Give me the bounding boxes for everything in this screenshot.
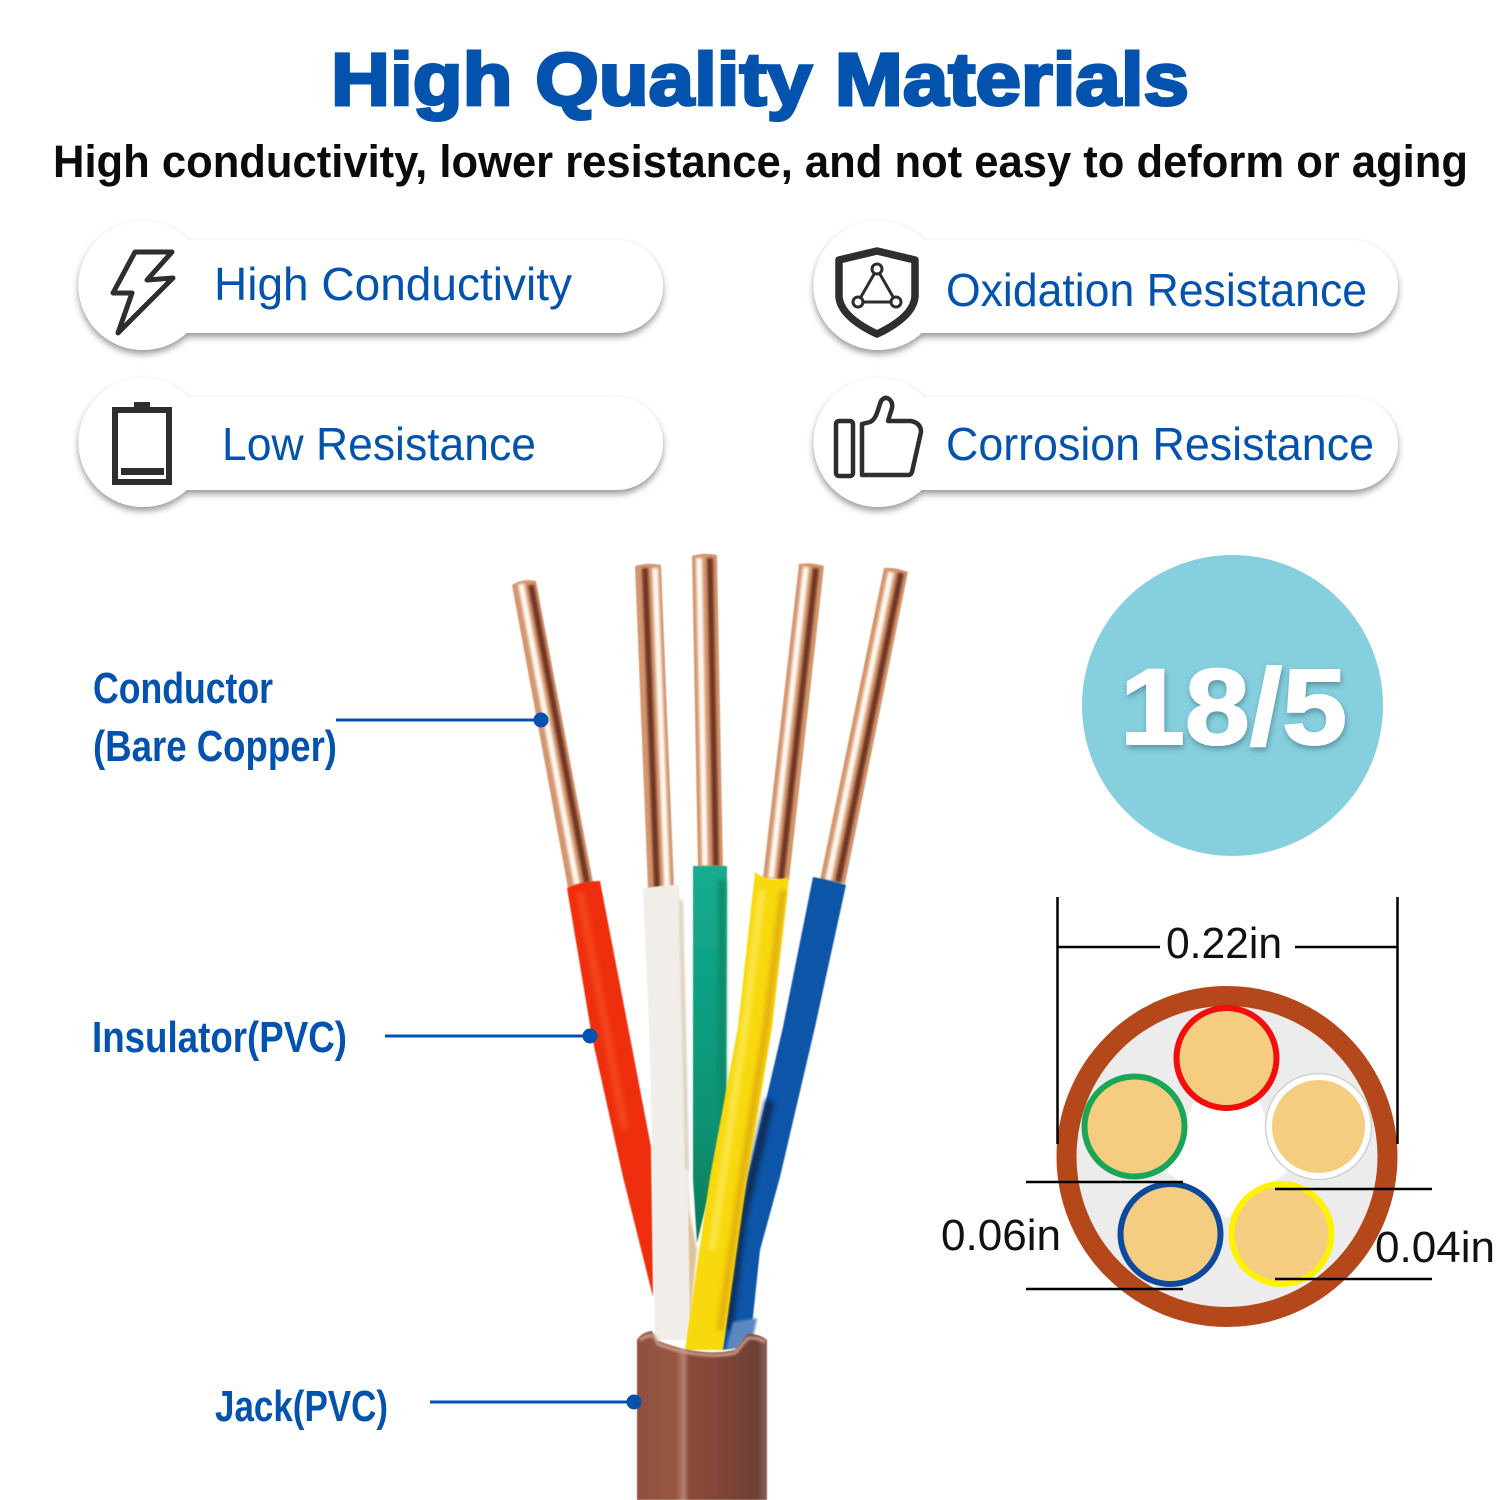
gauge badge 18/5: 18/5 xyxy=(1120,646,1347,767)
core: white xyxy=(1266,1074,1372,1180)
icon: shield xyxy=(839,251,915,334)
label: conductor: Conductor xyxy=(93,664,273,713)
callout: conductor xyxy=(93,664,548,771)
callout: insulator xyxy=(92,1013,598,1062)
beige shade between white and yellow xyxy=(682,1120,697,1320)
white insulator xyxy=(643,885,690,1340)
jacket ring xyxy=(1066,996,1388,1317)
label: oxidation resistance: Oxidation Resistance xyxy=(946,264,1367,316)
core: blue xyxy=(1120,1184,1220,1284)
red insulator xyxy=(567,881,653,1297)
cable cross-section diagram xyxy=(1066,996,1388,1317)
blue insulator xyxy=(722,877,846,1350)
title: High Quality Materials xyxy=(331,38,1189,121)
core: yellow xyxy=(1232,1184,1332,1284)
centre gap xyxy=(1167,1103,1287,1218)
gauge badge 18/5 xyxy=(1082,555,1383,856)
label: low resistance: Low Resistance xyxy=(222,418,536,470)
label: high conductivity: High Conductivity xyxy=(214,258,572,310)
green insulator xyxy=(693,866,727,1243)
dimension: 0.04in conductor diameter: 0.04in xyxy=(1375,1223,1495,1272)
label: jack: Jack(PVC) xyxy=(215,1382,388,1431)
feature pill: low resistance xyxy=(78,378,663,507)
feature pill: high conductivity xyxy=(78,221,663,350)
core: red xyxy=(1176,1008,1276,1108)
core: green xyxy=(1084,1076,1184,1176)
label: insulator: Insulator(PVC) xyxy=(92,1013,347,1062)
icon: battery xyxy=(115,402,169,482)
dimension: 0.22in overall diameter: 0.22in xyxy=(1166,919,1282,968)
copper conductor 3 xyxy=(692,554,723,867)
feature pill: corrosion resistance xyxy=(814,378,1398,507)
icon: thumbs up xyxy=(836,398,921,476)
copper conductor 1 xyxy=(512,580,593,888)
cable photo illustration xyxy=(512,554,908,1500)
label: corrosion resistance: Corrosion Resistance xyxy=(946,418,1374,470)
icon: lightning bolt xyxy=(113,252,173,333)
feature pill: oxidation resistance xyxy=(814,221,1398,350)
subtitle: High conductivity, lower resistance, and not easy to deform or aging xyxy=(53,136,1468,187)
dimension: 0.06in core diameter: 0.06in xyxy=(941,1211,1061,1260)
yellow insulator xyxy=(685,872,789,1350)
copper conductor 4 xyxy=(763,563,824,880)
copper conductor 2 xyxy=(635,564,674,889)
callout: jacket xyxy=(215,1382,642,1431)
label: bare copper: (Bare Copper) xyxy=(93,722,337,771)
copper conductor 5 xyxy=(820,568,908,884)
brown jacket xyxy=(637,1331,767,1500)
